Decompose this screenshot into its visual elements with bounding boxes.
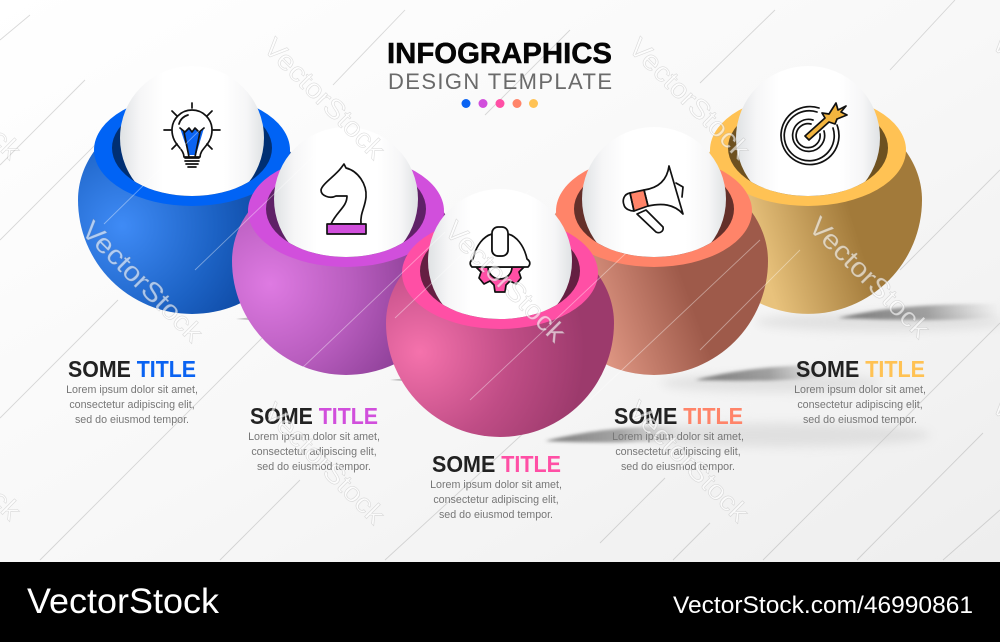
text block: pink: sed do eiusmod tempor. xyxy=(439,509,553,521)
text block: purple xyxy=(248,403,380,473)
title xyxy=(387,38,612,108)
colour dots xyxy=(462,99,538,108)
text block: coral: Lorem ipsum dolor sit amet, xyxy=(612,431,744,443)
ground shadows xyxy=(236,304,1000,447)
text block: purple: SOME TITLE xyxy=(250,403,378,429)
icon: megaphone xyxy=(623,166,683,233)
text block: coral xyxy=(612,403,744,473)
footer id: VectorStock.com/46990861 xyxy=(673,592,973,619)
icon: helmet with gear xyxy=(470,227,530,292)
text block: gold xyxy=(794,356,926,426)
watermark: VectorStock xyxy=(258,397,391,530)
text block: coral: sed do eiusmod tempor. xyxy=(621,461,735,473)
text block: gold: Lorem ipsum dolor sit amet, xyxy=(794,384,926,396)
text block: blue: sed do eiusmod tempor. xyxy=(75,414,189,426)
heading: design template: DESIGN TEMPLATE xyxy=(388,69,612,94)
icon: chess knight xyxy=(321,164,366,234)
panel: gold sphere xyxy=(709,94,922,314)
panel: blue sphere xyxy=(78,90,291,314)
footer bar xyxy=(0,562,1000,642)
watermark: VectorStock xyxy=(803,211,936,344)
text block: pink: SOME TITLE xyxy=(432,451,561,477)
text block: pink xyxy=(430,451,562,521)
panel: pink sphere xyxy=(386,214,614,437)
text block: coral: consectetur adipiscing elit, xyxy=(615,446,741,458)
text block: gold: SOME TITLE xyxy=(796,356,925,382)
text block: purple: sed do eiusmod tempor. xyxy=(257,461,371,473)
panel: purple sphere xyxy=(232,152,446,375)
footer logo: VectorStock xyxy=(27,582,220,621)
watermark: VectorStock xyxy=(622,395,755,528)
heading: infographics: INFOGRAPHICS xyxy=(387,38,612,70)
text block: blue: SOME TITLE xyxy=(68,356,196,382)
text block: purple: Lorem ipsum dolor sit amet, xyxy=(248,431,380,443)
text block: purple: consectetur adipiscing elit, xyxy=(251,446,377,458)
watermark: VectorStock xyxy=(258,32,391,165)
text block: coral: SOME TITLE xyxy=(614,403,743,429)
text block: blue xyxy=(66,356,198,426)
diagonal lines over spheres xyxy=(104,125,800,400)
watermark: VectorStock xyxy=(439,215,572,348)
panel: coral sphere xyxy=(554,152,768,375)
text block: blue: Lorem ipsum dolor sit amet, xyxy=(66,384,198,396)
text block: blue: consectetur adipiscing elit, xyxy=(69,399,195,411)
text block: pink: consectetur adipiscing elit, xyxy=(433,494,559,506)
text block: gold: consectetur adipiscing elit, xyxy=(797,399,923,411)
watermark: VectorStock xyxy=(76,215,209,348)
text block: pink: Lorem ipsum dolor sit amet, xyxy=(430,479,562,491)
watermark xyxy=(0,28,1000,530)
watermark: VectorStock xyxy=(623,32,756,165)
text block: gold: sed do eiusmod tempor. xyxy=(803,414,917,426)
icon: light bulb xyxy=(164,103,220,167)
icon: target with dart xyxy=(781,103,847,165)
